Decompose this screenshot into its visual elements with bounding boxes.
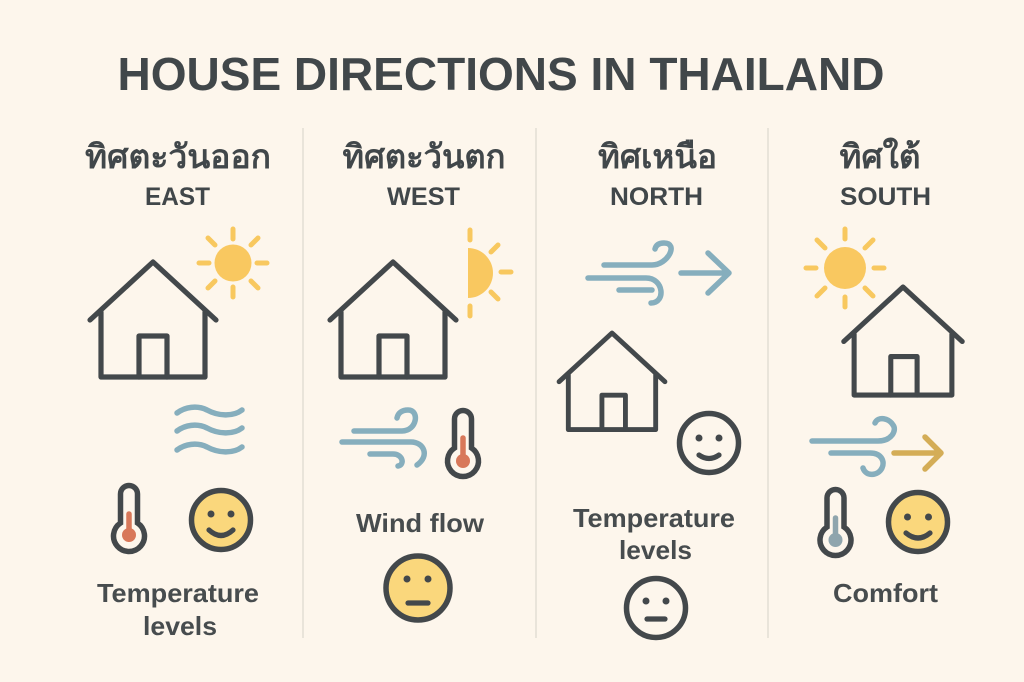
icon: wind west [342, 410, 424, 466]
heading: east English: EAST [145, 183, 210, 211]
icon: outline smiley north [680, 414, 738, 472]
icon: half sun west [468, 230, 511, 316]
heading: south Thai: ทิศใต้ [840, 137, 920, 175]
icon: house west [330, 262, 456, 377]
heading: west English: WEST [387, 183, 460, 211]
panel: north [559, 138, 738, 638]
icon: house east [90, 262, 216, 377]
icon: waves [177, 407, 242, 452]
heading: south English: SOUTH [840, 183, 931, 211]
label: wind flow: Wind flow [356, 508, 485, 538]
icon: smiley east [192, 490, 250, 550]
icon: outline neutral face north [626, 578, 686, 638]
label: comfort: Comfort [833, 578, 938, 608]
heading: north English: NORTH [610, 183, 703, 211]
heading: east Thai: ทิศตะวันออก [85, 138, 271, 175]
icon: sun south [806, 229, 884, 307]
icon: sun east [199, 229, 267, 297]
icon: thermometer east [114, 486, 144, 551]
title: HOUSE DIRECTIONS IN THAILAND [118, 48, 884, 100]
icon: neutral face west [386, 556, 450, 620]
label: temperature levels east: Temperature [97, 578, 259, 608]
icon: thermometer west [448, 410, 478, 476]
label: temperature levels north: Temperature [573, 503, 735, 533]
heading: west Thai: ทิศตะวันตก [342, 138, 506, 175]
panel: south [806, 137, 962, 608]
icon: house south [844, 287, 962, 395]
icon: smiley south [888, 492, 948, 552]
panel: east [85, 138, 271, 641]
icon: wind with arrow north [588, 243, 729, 303]
label: temperature levels north: levels [619, 535, 692, 565]
label: temperature levels east: levels [143, 611, 217, 641]
panel: west [330, 138, 511, 620]
label: temperature levels north [573, 503, 735, 565]
icon: house north [559, 333, 665, 430]
heading: north Thai: ทิศเหนือ [598, 138, 717, 175]
icon: wind with arrow south [812, 419, 941, 474]
label: temperature levels east [97, 578, 259, 641]
icon: thermometer south [820, 490, 851, 555]
